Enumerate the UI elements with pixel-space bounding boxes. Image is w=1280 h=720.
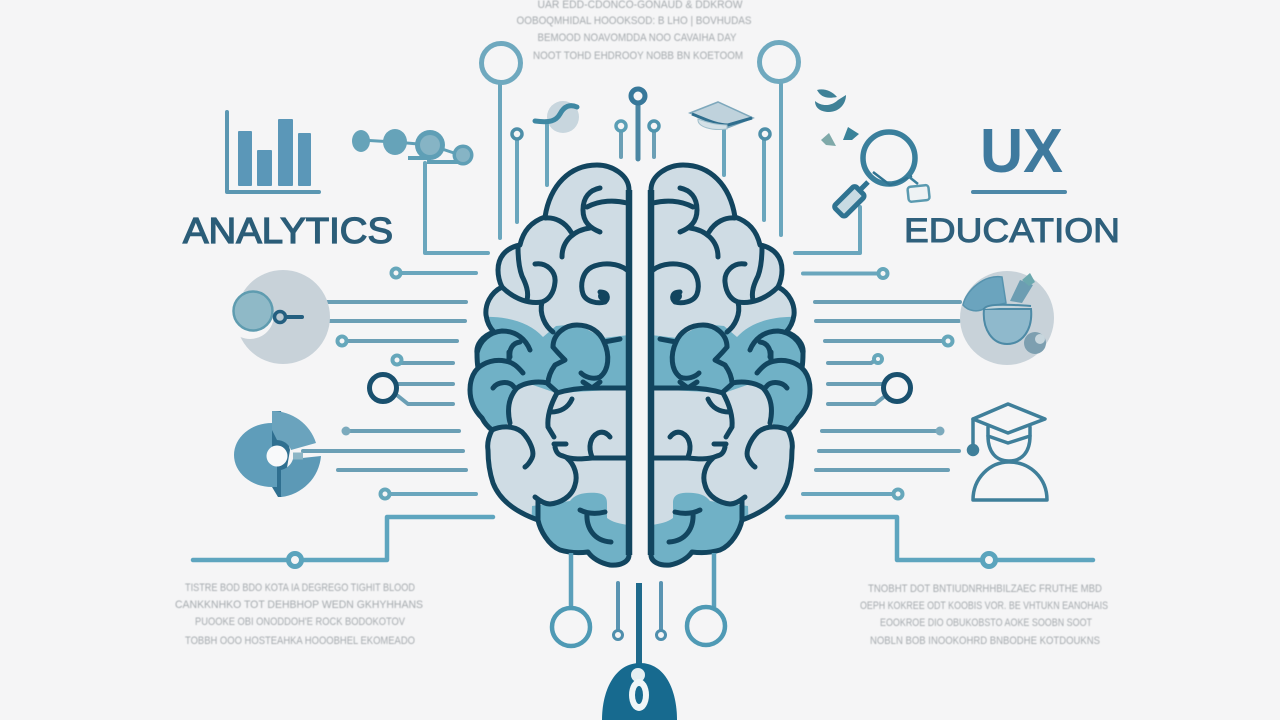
icon: top left pale disc with wave <box>535 101 579 133</box>
bottom left caption text: TISTRE BOD BDO KOTA IA DEGREGO TIGHIT BLOOD <box>185 582 415 594</box>
bottom right caption text: NOBLN BOB INOOKOHRD BNBODHE KOTDOUKNS <box>870 635 1100 647</box>
right circuit lines <box>787 269 1093 566</box>
icon: top mortarboard <box>690 102 753 130</box>
icon: magnifying glass <box>795 132 930 253</box>
icon: right disc with cup <box>960 271 1054 365</box>
left circuit lines <box>193 268 493 566</box>
icon: computer mouse <box>602 663 677 720</box>
icon: left segmented disc <box>234 411 321 497</box>
icon: dark ring node right <box>884 374 910 402</box>
bottom left caption text: TOBBH OOO HOSTEAHKA HOOOBHEL EKOMEADO <box>185 635 415 647</box>
brain left hemisphere <box>465 165 629 570</box>
brain illustration <box>465 165 815 570</box>
brain right hemisphere <box>651 165 815 570</box>
top caption text: OOBOQMHIDAL HOOOKSOD: B LHO | BOVHUDAS <box>516 15 752 27</box>
bottom left caption text: PUOOKE OBI ONODDOH'E ROCK BODOKOTOV <box>195 616 406 628</box>
icon: molecule connector <box>352 129 488 253</box>
heading: analytics: ANALYTICS <box>183 210 393 251</box>
bottom circuit connectors <box>552 553 725 665</box>
divider under UX <box>971 190 1067 194</box>
bottom left caption text: CANKKNHKO TOT DEHBHOP WEDN GKHYHHANS <box>175 599 423 611</box>
top circuit connectors <box>482 42 798 238</box>
icon: left magnifier disc <box>226 270 330 364</box>
icon: dark ring node left <box>370 374 396 402</box>
top caption text: NOOT TOHD EHDROOY NOBB BN KOETOOM <box>533 50 743 62</box>
bottom right caption text: TNOBHT DOT BNTIUDNRHHBILZAEC FRUTHE MBD <box>868 583 1102 595</box>
heading: UX: UX <box>980 117 1063 186</box>
icon: bar chart <box>227 112 319 192</box>
top caption text: BEMOOD NOAVOMDDA NOO CAVAIHA DAY <box>538 32 737 44</box>
bottom right caption text: OEPH KOKREE ODT KOOBIS VOR. BE VHTUKN EANOHAIS <box>860 600 1108 612</box>
bottom right caption text: EOOKROE DIO OBUKOBSTO AOKE SOOBN SOOT <box>880 617 1092 629</box>
bottom right caption text <box>860 583 1108 647</box>
heading: education: EDUCATION <box>904 212 1120 250</box>
icon: graduate person <box>968 404 1047 500</box>
top caption text <box>516 0 752 62</box>
bottom left caption text <box>175 582 423 647</box>
icon: scattered fragments <box>815 89 859 146</box>
